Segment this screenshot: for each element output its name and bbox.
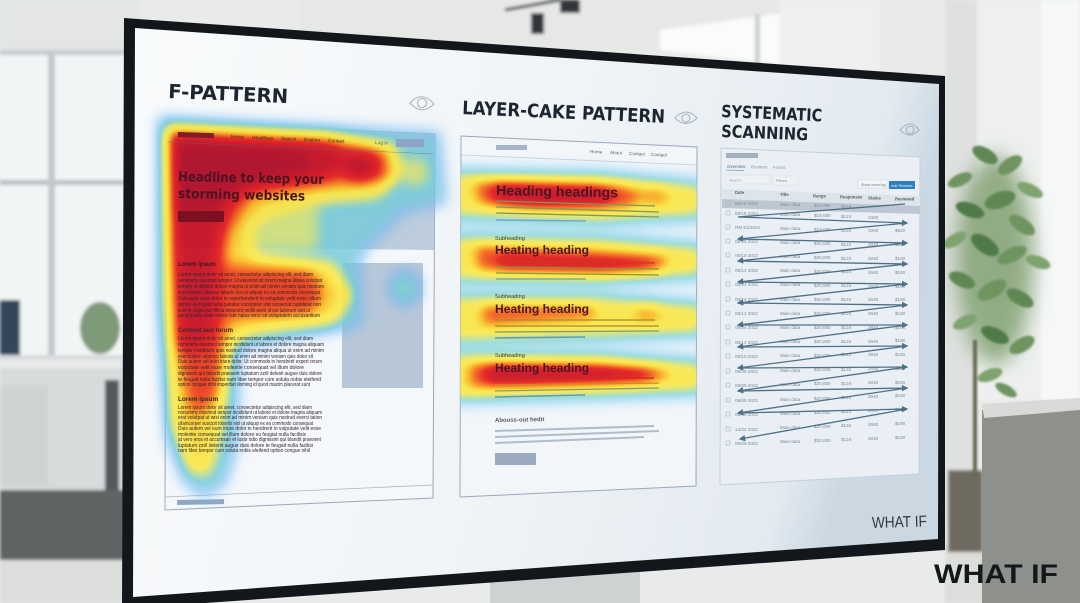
table rows: 2840 xyxy=(868,380,879,385)
body text block 1: exercitation ullamco laboris nisi ut aliquip ex ea commodo consequat xyxy=(178,290,320,296)
table rows: $19,000 xyxy=(814,203,831,208)
table rows: $190 xyxy=(895,297,906,302)
table rows: Main data xyxy=(780,382,801,387)
side cabinet xyxy=(982,398,1080,603)
table rows: Main data xyxy=(780,411,801,416)
table rows: 2840 xyxy=(868,325,879,330)
table rows: 2840 xyxy=(868,284,879,289)
table rows: $20,000 xyxy=(814,325,831,330)
about section: Abouss-out hedit xyxy=(495,417,544,424)
table panel: Forms xyxy=(773,165,786,170)
table rows: $190 xyxy=(895,407,906,412)
heading: F-pattern: F-PATTERN xyxy=(168,80,289,108)
table rows: Main data xyxy=(780,212,801,217)
table rows: $124 xyxy=(841,204,852,209)
hero headline: Headline to keep your xyxy=(178,169,325,188)
table rows: $124 xyxy=(841,256,852,261)
icon: eye xyxy=(900,124,919,135)
body text block 1: tempor incididunt dolore magna ut enim ad minim veniam quis nostrum xyxy=(178,284,324,290)
on-screen logo: WHAT IF xyxy=(872,514,927,532)
table panel: Show more log xyxy=(861,183,886,187)
table rows: $190 xyxy=(895,270,906,275)
body text block 3: Lorem ipsum dolor sit amet, consectetur adipiscing elit, sed diam xyxy=(178,405,312,411)
table rows: Main data xyxy=(780,339,801,344)
table rows: $20,000 xyxy=(814,353,831,358)
table rows: $124 xyxy=(841,297,852,302)
heading section 3: Heating heading xyxy=(495,303,589,316)
table rows: $190 xyxy=(895,393,906,398)
table rows: 08/19 2024 xyxy=(735,201,758,206)
nav bar: Search xyxy=(281,136,297,143)
about section xyxy=(495,417,659,465)
body text block 3: Lorem ipsum xyxy=(178,396,218,403)
table panel: Responses xyxy=(840,194,863,200)
body text block 2: Lorem ipsum dolor sit amet, consectetur adipiscing elit, sed diam xyxy=(178,336,313,342)
icon: eye xyxy=(410,97,434,110)
wireframe page: Contact xyxy=(651,152,668,158)
wireframe page: Home xyxy=(590,149,603,154)
body text block 2: exercitation ullamco laboris ut enim ad minim veniam quis dolor sit xyxy=(178,354,313,360)
nav bar: Log in xyxy=(375,140,389,147)
heading section 3 xyxy=(495,294,659,338)
table rows: $30,000 xyxy=(814,255,831,260)
table panel: Overview xyxy=(727,164,746,169)
scan path arrows xyxy=(738,204,907,439)
table panel: Status xyxy=(868,196,881,200)
table rows: $124 xyxy=(841,283,852,288)
body text block 3: ullamcorper suscipit lobortis nisl ut aliquip ex ea commodo consequat xyxy=(178,421,313,427)
table rows: 08/09 2022 xyxy=(735,441,758,446)
nav bar: Headlines xyxy=(252,135,274,142)
table rows: 08/14 2022 xyxy=(735,282,758,287)
table rows: $124 xyxy=(841,325,852,330)
table rows: $20,000 xyxy=(814,424,831,429)
table rows xyxy=(726,201,906,446)
body text block 1: Lorem ipsum dolor sit amet, consectetur adipiscing elit, sed diam xyxy=(178,272,313,278)
table rows: 2840 xyxy=(868,366,879,371)
body text block 2 xyxy=(178,327,324,388)
table rows: $20,000 xyxy=(814,283,831,288)
table panel: Title xyxy=(780,192,789,197)
table rows: $190 xyxy=(895,380,906,385)
body text block 1: dolore eu fugiat nulla pariatur excepteur sint occaecat cupidatat non xyxy=(178,302,321,308)
table rows: Main data xyxy=(780,268,801,273)
table rows: Main data xyxy=(780,297,801,302)
table rows: 2840 xyxy=(868,242,879,247)
table rows: $20,000 xyxy=(814,297,831,302)
table rows: 08/19 2022 xyxy=(735,239,758,244)
table rows: 3400 xyxy=(868,215,879,220)
heading section 2: Subheading xyxy=(495,236,525,242)
table rows: $20,000 xyxy=(814,311,831,316)
body text block 3: Duis autem vel eum iriure dolor in hendrerit in vulputate velit esse xyxy=(178,426,321,432)
table rows: $20,000 xyxy=(814,438,831,443)
monitor xyxy=(122,18,945,603)
table rows: $190 xyxy=(895,421,906,426)
table rows: 2840 xyxy=(868,352,879,357)
table rows: $19,000 xyxy=(814,213,831,218)
table rows: 2840 xyxy=(868,394,879,399)
table rows: $124 xyxy=(841,228,852,233)
table rows: Main data xyxy=(780,439,801,444)
table rows: $124 xyxy=(841,395,852,400)
table rows: $19,000 xyxy=(814,227,831,232)
table rows: $124 xyxy=(841,242,852,247)
body text block 2: option congue nihil imperdiet doming id quod mazim placerat sunt xyxy=(178,382,310,388)
heading section 4: Subheading xyxy=(495,353,525,359)
body text block 2: Duis autem vel eum iriure dolor. Ut commodo in hendrerit expert rerum xyxy=(178,359,322,365)
body text block 2: vulputate velit esse molestie consequat vel illum dolore xyxy=(178,365,304,371)
nav bar xyxy=(167,132,434,154)
body text block 3: nam liber tempor cum soluta nobis eleifend option congue nihil xyxy=(178,448,310,454)
heading section 1: Heading headings xyxy=(496,182,618,200)
body text block 2: nonummy eiusmod tempor incididunt ut labore et dolore magna aliquam xyxy=(178,342,324,348)
table rows: $20,000 xyxy=(814,339,831,344)
table rows: 08/10 2022 xyxy=(735,354,758,359)
table rows: 2840 xyxy=(868,408,879,413)
body text block 3: at vero eros et accumsan et iusto odio dignissim qui blandit praesent xyxy=(178,437,321,443)
table rows: $20,000 xyxy=(814,269,831,274)
body text block 1: nonummy eiusmod tempor. Ut eiusmod sit lorem magna aliqua volutpat xyxy=(178,278,322,284)
table panel: Search xyxy=(729,178,742,182)
nav bar: Explore xyxy=(304,137,321,144)
table rows: Main data xyxy=(780,226,801,231)
table rows: $20,000 xyxy=(814,396,831,401)
table rows: $20,000 xyxy=(814,367,831,372)
body text block 1: perspiciatis unde omnis iste natus error sit voluptatem accusantium xyxy=(178,313,320,319)
table rows: $920 xyxy=(895,228,906,233)
table rows: $190 xyxy=(895,366,906,371)
table rows: $124 xyxy=(841,214,852,219)
table rows: 2840 xyxy=(868,256,879,261)
table rows: 2840 xyxy=(868,436,879,441)
heading section 2: Heating heading xyxy=(495,244,589,257)
table rows: $190 xyxy=(895,338,906,343)
table rows: $190 xyxy=(895,311,906,316)
table rows: $124 xyxy=(841,352,852,357)
wireframe page: About xyxy=(610,150,623,155)
table rows: $124 xyxy=(841,269,852,274)
wireframe page xyxy=(165,122,435,510)
table rows: Main data xyxy=(780,325,801,330)
table rows: $20,000 xyxy=(814,381,831,386)
body text block 2: Content sed forum xyxy=(178,327,233,334)
wireframe page: Contact xyxy=(629,151,646,157)
table rows: RM 51/2022 xyxy=(735,225,760,230)
table rows: $124 xyxy=(841,423,852,428)
body text block 1: Lorem ipsum xyxy=(178,262,216,268)
table rows: Main data xyxy=(780,254,801,259)
panel: F-pattern xyxy=(158,80,446,510)
heading section 1 xyxy=(496,182,659,221)
heading: systematic scanning xyxy=(721,102,823,145)
table rows: $190 xyxy=(895,435,906,440)
table rows: Main data xyxy=(780,397,801,402)
body text block 2: dignissim qui blandit praesent luptatum zzril delenit augue duis dolore xyxy=(178,371,322,377)
table rows: $124 xyxy=(841,381,852,386)
table panel: Reviewed xyxy=(895,196,915,202)
table rows: 08/09 2022 xyxy=(735,412,758,417)
heading: systematic scanning: SCANNING xyxy=(721,122,809,145)
table rows: $190 xyxy=(895,352,906,357)
table rows: 08/09 2022 xyxy=(735,398,758,403)
table rows: 14/24 2022 xyxy=(735,427,758,432)
heading: systematic scanning: SYSTEMATIC xyxy=(721,102,823,126)
table rows: 08/14 2022 xyxy=(735,268,758,273)
nav bar: Contact xyxy=(328,138,345,145)
table rows: Main data xyxy=(780,282,801,287)
body text block 3: erat volutpat ut wisi enim ad minim veniam quis nostrud exerci tation xyxy=(178,415,322,421)
table rows: $20,000 xyxy=(814,410,831,415)
table rows: 2840 xyxy=(868,297,879,302)
table rows: Main data xyxy=(780,240,801,245)
table rows: 2840 xyxy=(868,311,879,316)
nav bar: Home xyxy=(231,134,244,141)
potted plant xyxy=(941,142,1052,475)
table rows: 08/09 2022 xyxy=(735,369,758,374)
table rows: $190 xyxy=(895,284,906,289)
body text block 3: molestie consequat vel illum dolore eu feugiat nulla facilisis xyxy=(178,432,306,438)
table rows: 08/19 2022 xyxy=(735,253,758,258)
table panel: Add Reviews xyxy=(891,184,913,188)
heading section 3: Subheading xyxy=(495,294,525,300)
body text block 1 xyxy=(178,262,324,319)
hero headline xyxy=(178,169,325,222)
table rows: $124 xyxy=(841,311,852,316)
body text block 3: nonummy eiusmod tempor incididunt ut labore et dolore magna aliquam xyxy=(178,410,322,416)
heatmap: layer-cake bands xyxy=(450,166,710,406)
monitor stand xyxy=(490,572,640,603)
heading section 4: Heating heading xyxy=(495,362,589,375)
body text block 3: luptatum zzril delenit augue duis dolore te feugait nulla facilisi xyxy=(178,443,313,449)
table rows: Main data xyxy=(780,202,801,207)
heading section 4 xyxy=(495,353,659,397)
table rows: $124 xyxy=(841,339,852,344)
table rows: 08/14 2022 xyxy=(735,325,758,330)
table rows: 1900 xyxy=(868,228,879,233)
table rows: $124 xyxy=(841,409,852,414)
table rows: $124 xyxy=(841,367,852,372)
table rows: 08/19 2024 xyxy=(735,211,758,216)
table panel: Date xyxy=(735,190,745,195)
table rows: 08/12 2022 xyxy=(735,340,758,345)
body text block 2: tempor incididunt quis nostrud dolore magna aliqua ut enim ad minim xyxy=(178,348,324,354)
body text block 1: Duis aute irure dolor in reprehenderit in voluptate velit esse cillum xyxy=(178,296,321,302)
body text block 3 xyxy=(178,396,322,454)
panel: layer-cake pattern xyxy=(450,98,710,497)
table panel xyxy=(720,148,920,485)
table rows: 2840 xyxy=(868,422,879,427)
table panel: Filters xyxy=(776,178,787,183)
table rows: $190 xyxy=(895,325,906,330)
panel: systematic scanning xyxy=(720,102,920,485)
table rows: Main data xyxy=(780,368,801,373)
table panel: Reviews xyxy=(751,164,768,170)
body text block 1: sunt in culpa qui officia deserunt mollit anim id est laborum sed ut xyxy=(178,308,310,314)
table panel: Range xyxy=(813,194,826,198)
table rows: 2840 xyxy=(868,270,879,275)
table rows: Main data xyxy=(780,311,801,316)
monitor screen xyxy=(133,28,939,597)
wireframe page xyxy=(460,136,697,497)
table rows: Main data xyxy=(780,353,801,358)
corner logo: WHAT IF xyxy=(934,559,1058,589)
table rows: 2840 xyxy=(868,339,879,344)
icon: eye xyxy=(675,112,697,124)
heading section 2 xyxy=(495,236,659,279)
body text block 2: te feugait nulla facilisi nam liber tempor cum soluta nobis eleifend xyxy=(178,377,321,383)
table rows: $124 xyxy=(841,437,852,442)
table rows: 08/14 2022 xyxy=(735,297,758,302)
table rows: $30,000 xyxy=(814,241,831,246)
table rows: Main data xyxy=(780,425,801,430)
monitor bezel xyxy=(122,18,945,603)
table rows: 08/14 2022 xyxy=(735,311,758,316)
heading: layer-cake pattern: LAYER-CAKE PATTERN xyxy=(462,98,666,128)
table rows: $190 xyxy=(895,242,906,247)
heatmap: F-pattern xyxy=(158,116,446,498)
table rows: 08/09 2022 xyxy=(735,383,758,388)
table rows: $190 xyxy=(895,256,906,261)
hero headline: storming websites xyxy=(178,186,305,205)
